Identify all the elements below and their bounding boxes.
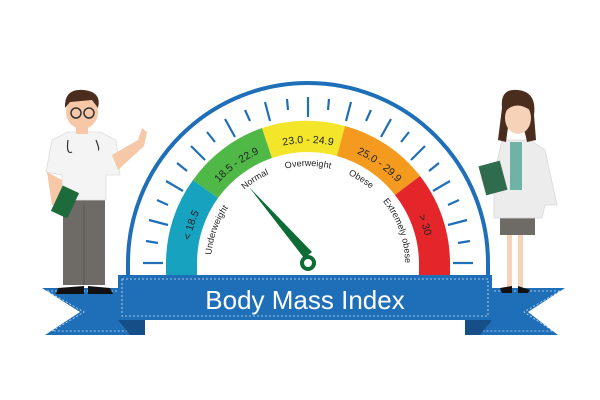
- category labels: Normal: [241, 168, 268, 190]
- needle: [249, 187, 316, 271]
- segment: obese: [337, 126, 420, 195]
- segment: underweight: [166, 180, 218, 275]
- segment: extremely obese: [395, 176, 450, 275]
- range numbers: < 18.5: [185, 210, 198, 240]
- segment: normal: [193, 128, 272, 198]
- female doctor: [478, 90, 557, 293]
- ribbon banner: [42, 275, 565, 335]
- range numbers: 18.5 - 22.9: [215, 148, 258, 182]
- tick marks: [143, 97, 473, 263]
- category labels: Underweight: [205, 205, 228, 254]
- banner title: Body Mass Index: [205, 285, 405, 315]
- folds: [118, 320, 145, 335]
- ribbon tail right: [470, 288, 565, 335]
- gauge: [126, 81, 490, 275]
- range numbers: 23.0 - 24.9: [282, 136, 334, 146]
- segment: overweight: [262, 121, 345, 158]
- male doctor: [46, 90, 147, 294]
- category labels: Extremely obese: [383, 198, 410, 263]
- ribbon main: [118, 275, 492, 320]
- category labels: Obese: [350, 170, 372, 188]
- range numbers: 25.0 - 29.9: [357, 148, 402, 182]
- category labels: Overweight: [285, 160, 332, 169]
- ribbon tail left: [42, 288, 140, 335]
- range numbers: > 30: [420, 214, 432, 235]
- category labels: [205, 160, 410, 263]
- outer arc: [128, 83, 488, 275]
- range numbers: [185, 136, 432, 240]
